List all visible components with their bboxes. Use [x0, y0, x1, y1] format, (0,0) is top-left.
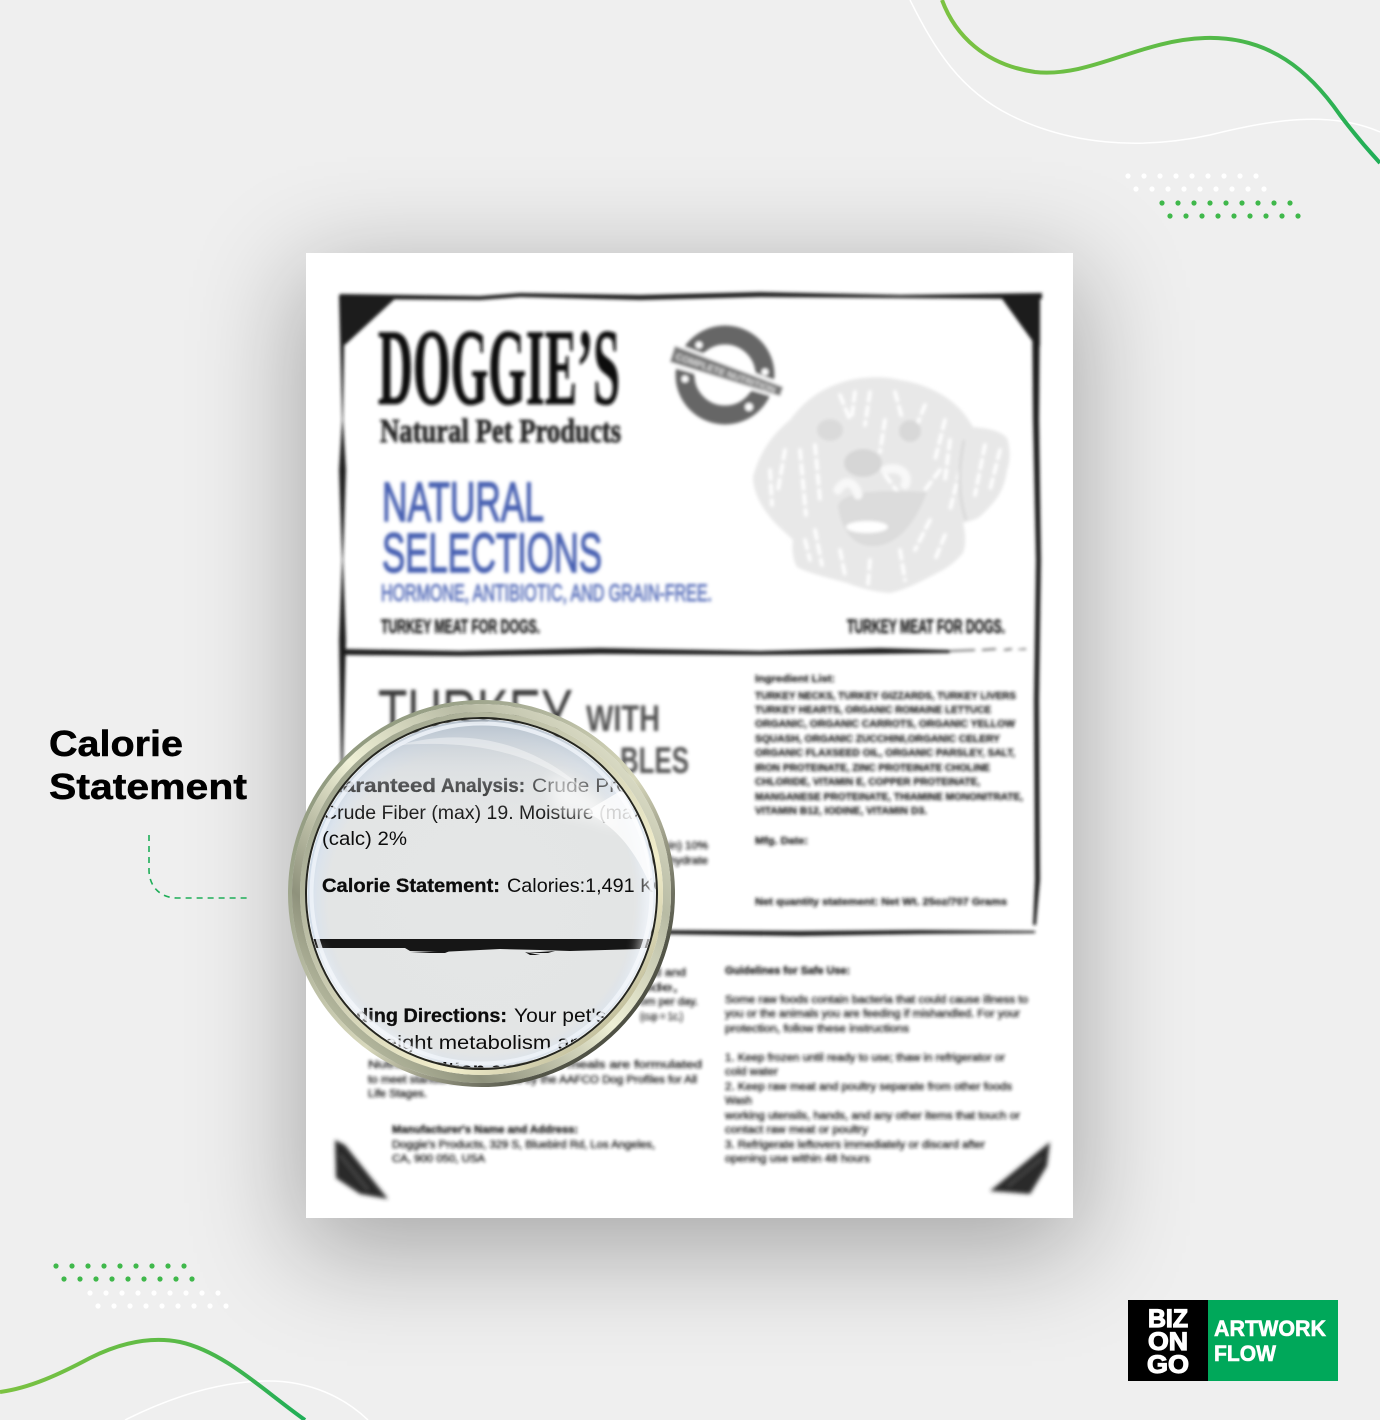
product line: Natural Selections: HORMONE, ANTIBIOTIC, AND GRAIN-FREE. [381, 580, 712, 607]
text block: ingredient list: Net quantity statement: Net Wt. 25oz/707 Grams [755, 896, 1007, 908]
text block: ingredient list [755, 673, 1023, 908]
lens glass with magnified text [308, 720, 656, 1068]
logo wordmark: GO [1147, 1351, 1189, 1379]
text block: guidelines for safe use: 3. Refrigerate leftovers immediately or discard after [725, 1139, 985, 1151]
decorative curves bottom left [0, 1340, 368, 1420]
logo wordmark: BIZ [1148, 1305, 1188, 1333]
panel: blurred pet food label [306, 253, 1073, 1218]
text block: guidelines for safe use: Wash [725, 1095, 752, 1107]
magnified guaranteed analysis text: Crude Fiber (max) 19. Moisture (max) [323, 802, 649, 824]
magnified calorie statement text: Calorie Statement: [322, 875, 500, 897]
text block: guidelines for safe use: 1. Keep frozen until ready to use; thaw in refrigerator or [725, 1052, 1005, 1064]
text block: left column fragments: Manufacturer's Name and Address: [392, 1124, 578, 1136]
text block: left column fragments: Doggie's Products, 329 S, Bluebird Rd, Los Angeles, [392, 1139, 655, 1151]
logo: Bizongo Artwork Flow [1128, 1300, 1338, 1381]
magnified feeding directions text: Your pet's [514, 1005, 606, 1027]
text block: ingredient list: ORGANIC, ORGANIC CARROTS, ORGANIC YELLOW [755, 718, 1015, 730]
brand name: Doggie's: Natural Pet Products [380, 413, 621, 450]
text block: guidelines for safe use: working utensils, hands, and any other items that touch or [724, 1110, 1020, 1122]
product descriptor lines [381, 617, 1005, 638]
product title: Turkey with vegetables: WITH [586, 698, 660, 739]
text block: left column fragments: and and [640, 967, 686, 979]
magnified guaranteed analysis text: (calc) 2% [322, 828, 407, 850]
magnified feeding directions text: weight metabolism and [368, 1032, 594, 1054]
heading: Calorie Statement: Calorie [49, 723, 183, 764]
magnified calorie statement text: Calories:1,491 KCal [507, 875, 683, 897]
magnified guaranteed analysis text: Crude Protein [532, 775, 662, 797]
logo product name: FLOW [1214, 1341, 1277, 1366]
text block: guidelines for safe use [724, 965, 1028, 1165]
logo product name [1214, 1316, 1327, 1366]
magnified feeding directions text: Feeding Directions: [322, 1005, 507, 1027]
text block: guidelines for safe use: cold water [725, 1066, 778, 1078]
heading: Calorie Statement: Statement [49, 766, 247, 807]
product title: Turkey with vegetables: BLES [620, 740, 689, 781]
logo wordmark [1147, 1305, 1189, 1379]
product line: Natural Selections: NATURAL [382, 470, 544, 533]
icon: complete nutrition stamp [668, 335, 785, 415]
text block: ingredient list: MANGANESE PROTEINATE, THIAMINE MONONITRATE, [755, 791, 1023, 803]
text block: ingredient list: TURKEY NECKS, TURKEY GIZZARDS, TURKEY LIVERS [755, 690, 1016, 702]
text block: left column fragments [368, 840, 708, 1165]
decorative curves top right [910, 0, 1380, 163]
product line: Natural Selections: SELECTIONS [382, 521, 602, 584]
text block: ingredient list: TURKEY HEARTS, ORGANIC ROMAINE LETTUCE [755, 704, 991, 716]
text block: left column fragments: Nutritional Adequacy: Doggie's meals are formulated [368, 1059, 702, 1071]
corner brush marks [335, 1140, 1050, 1199]
text block: guidelines for safe use: Some raw foods contain bacteria that could cause illness to [725, 994, 1028, 1006]
text block: left column fragments: carbohydrate [640, 855, 708, 867]
product title: Turkey with vegetables: TURKEY [378, 675, 573, 753]
product descriptor lines: TURKEY MEAT FOR DOGS. [847, 617, 1005, 638]
text block: ingredient list: Ingredient List: [755, 673, 835, 685]
magnified guaranteed analysis text: Analysis: [441, 775, 525, 797]
icon: complete nutrition stamp: COMPLETE NUTRITION [674, 351, 777, 395]
illustration: dog head sketch [753, 377, 1010, 593]
magnifying glass [290, 702, 683, 1085]
magnified black rule [300, 720, 665, 955]
text block: guidelines for safe use: 2. Keep raw meat and poultry separate from other foods [725, 1081, 1013, 1093]
magnified guaranteed analysis text [323, 778, 637, 849]
magnified guaranteed analysis text: Guaranteed [312, 775, 436, 797]
dot pattern bottom left [53, 1263, 229, 1309]
text block: guidelines for safe use: contact raw meat or poultry [725, 1124, 869, 1136]
text block: ingredient list: SQUASH, ORGANIC ZUCCHINI,ORGANIC CELERY [755, 733, 1000, 745]
glass reflections [308, 720, 658, 1068]
text block: left column fragments: (cup = 1c.) [640, 1011, 683, 1023]
panel: blurred pet food label: DOGGIE’S [378, 307, 620, 428]
magnified calorie statement text [322, 878, 656, 894]
logo wordmark: ON [1148, 1328, 1188, 1356]
text block: ingredient list: CHLORIDE, VITAMIN E, COPPER PROTEINATE, [755, 776, 980, 788]
text block: left column fragments: to meet standards established by the AAFCO Dog Profiles for All [368, 1074, 697, 1086]
text block: left column fragments: CA, 900 050, USA [392, 1153, 486, 1165]
lens rim [290, 702, 673, 1085]
text block: ingredient list: ORGANIC FLAXSEED OIL, ORGANIC PARSLEY, SALT, [755, 747, 1015, 759]
text block: guidelines for safe use: protection, follow these instructions [725, 1023, 910, 1035]
brand name: Doggie's [378, 307, 621, 450]
text block: left column fragments: fat (min) 10% [640, 840, 708, 852]
dashed connector to magnifier [149, 835, 250, 898]
text block: ingredient list: VITAMIN B12, IODINE, VITAMIN D3. [755, 805, 927, 817]
text block: left column fragments: Life Stages. [368, 1088, 427, 1100]
text block: left column fragments: om per day. [640, 996, 698, 1008]
magnified feeding directions text [357, 1008, 605, 1068]
product title: Turkey with vegetables [378, 675, 689, 781]
text block: guidelines for safe use: you or the animals you are feeding if mishandled. For your [725, 1008, 1020, 1020]
text block: left column fragments: ride, [640, 982, 678, 994]
label frame [339, 292, 1042, 936]
text block: guidelines for safe use: opening use within 48 hours [725, 1153, 871, 1165]
document drop shadow [306, 253, 1073, 1218]
product descriptor lines: TURKEY MEAT FOR DOGS. [381, 617, 540, 638]
text block: ingredient list: IRON PROTEINATE, ZINC PROTEINATE CHOLINE [755, 762, 990, 774]
logo product name: ARTWORK [1214, 1316, 1327, 1341]
product line: Natural Selections [381, 470, 712, 607]
magnified feeding directions text: Nutrition are all [400, 1059, 550, 1081]
text block: ingredient list: Mfg. Date: [755, 835, 808, 847]
dot pattern top right [1125, 173, 1301, 219]
text block: guidelines for safe use: Guidelines for Safe Use: [725, 965, 850, 977]
heading: Calorie Statement [49, 723, 247, 807]
